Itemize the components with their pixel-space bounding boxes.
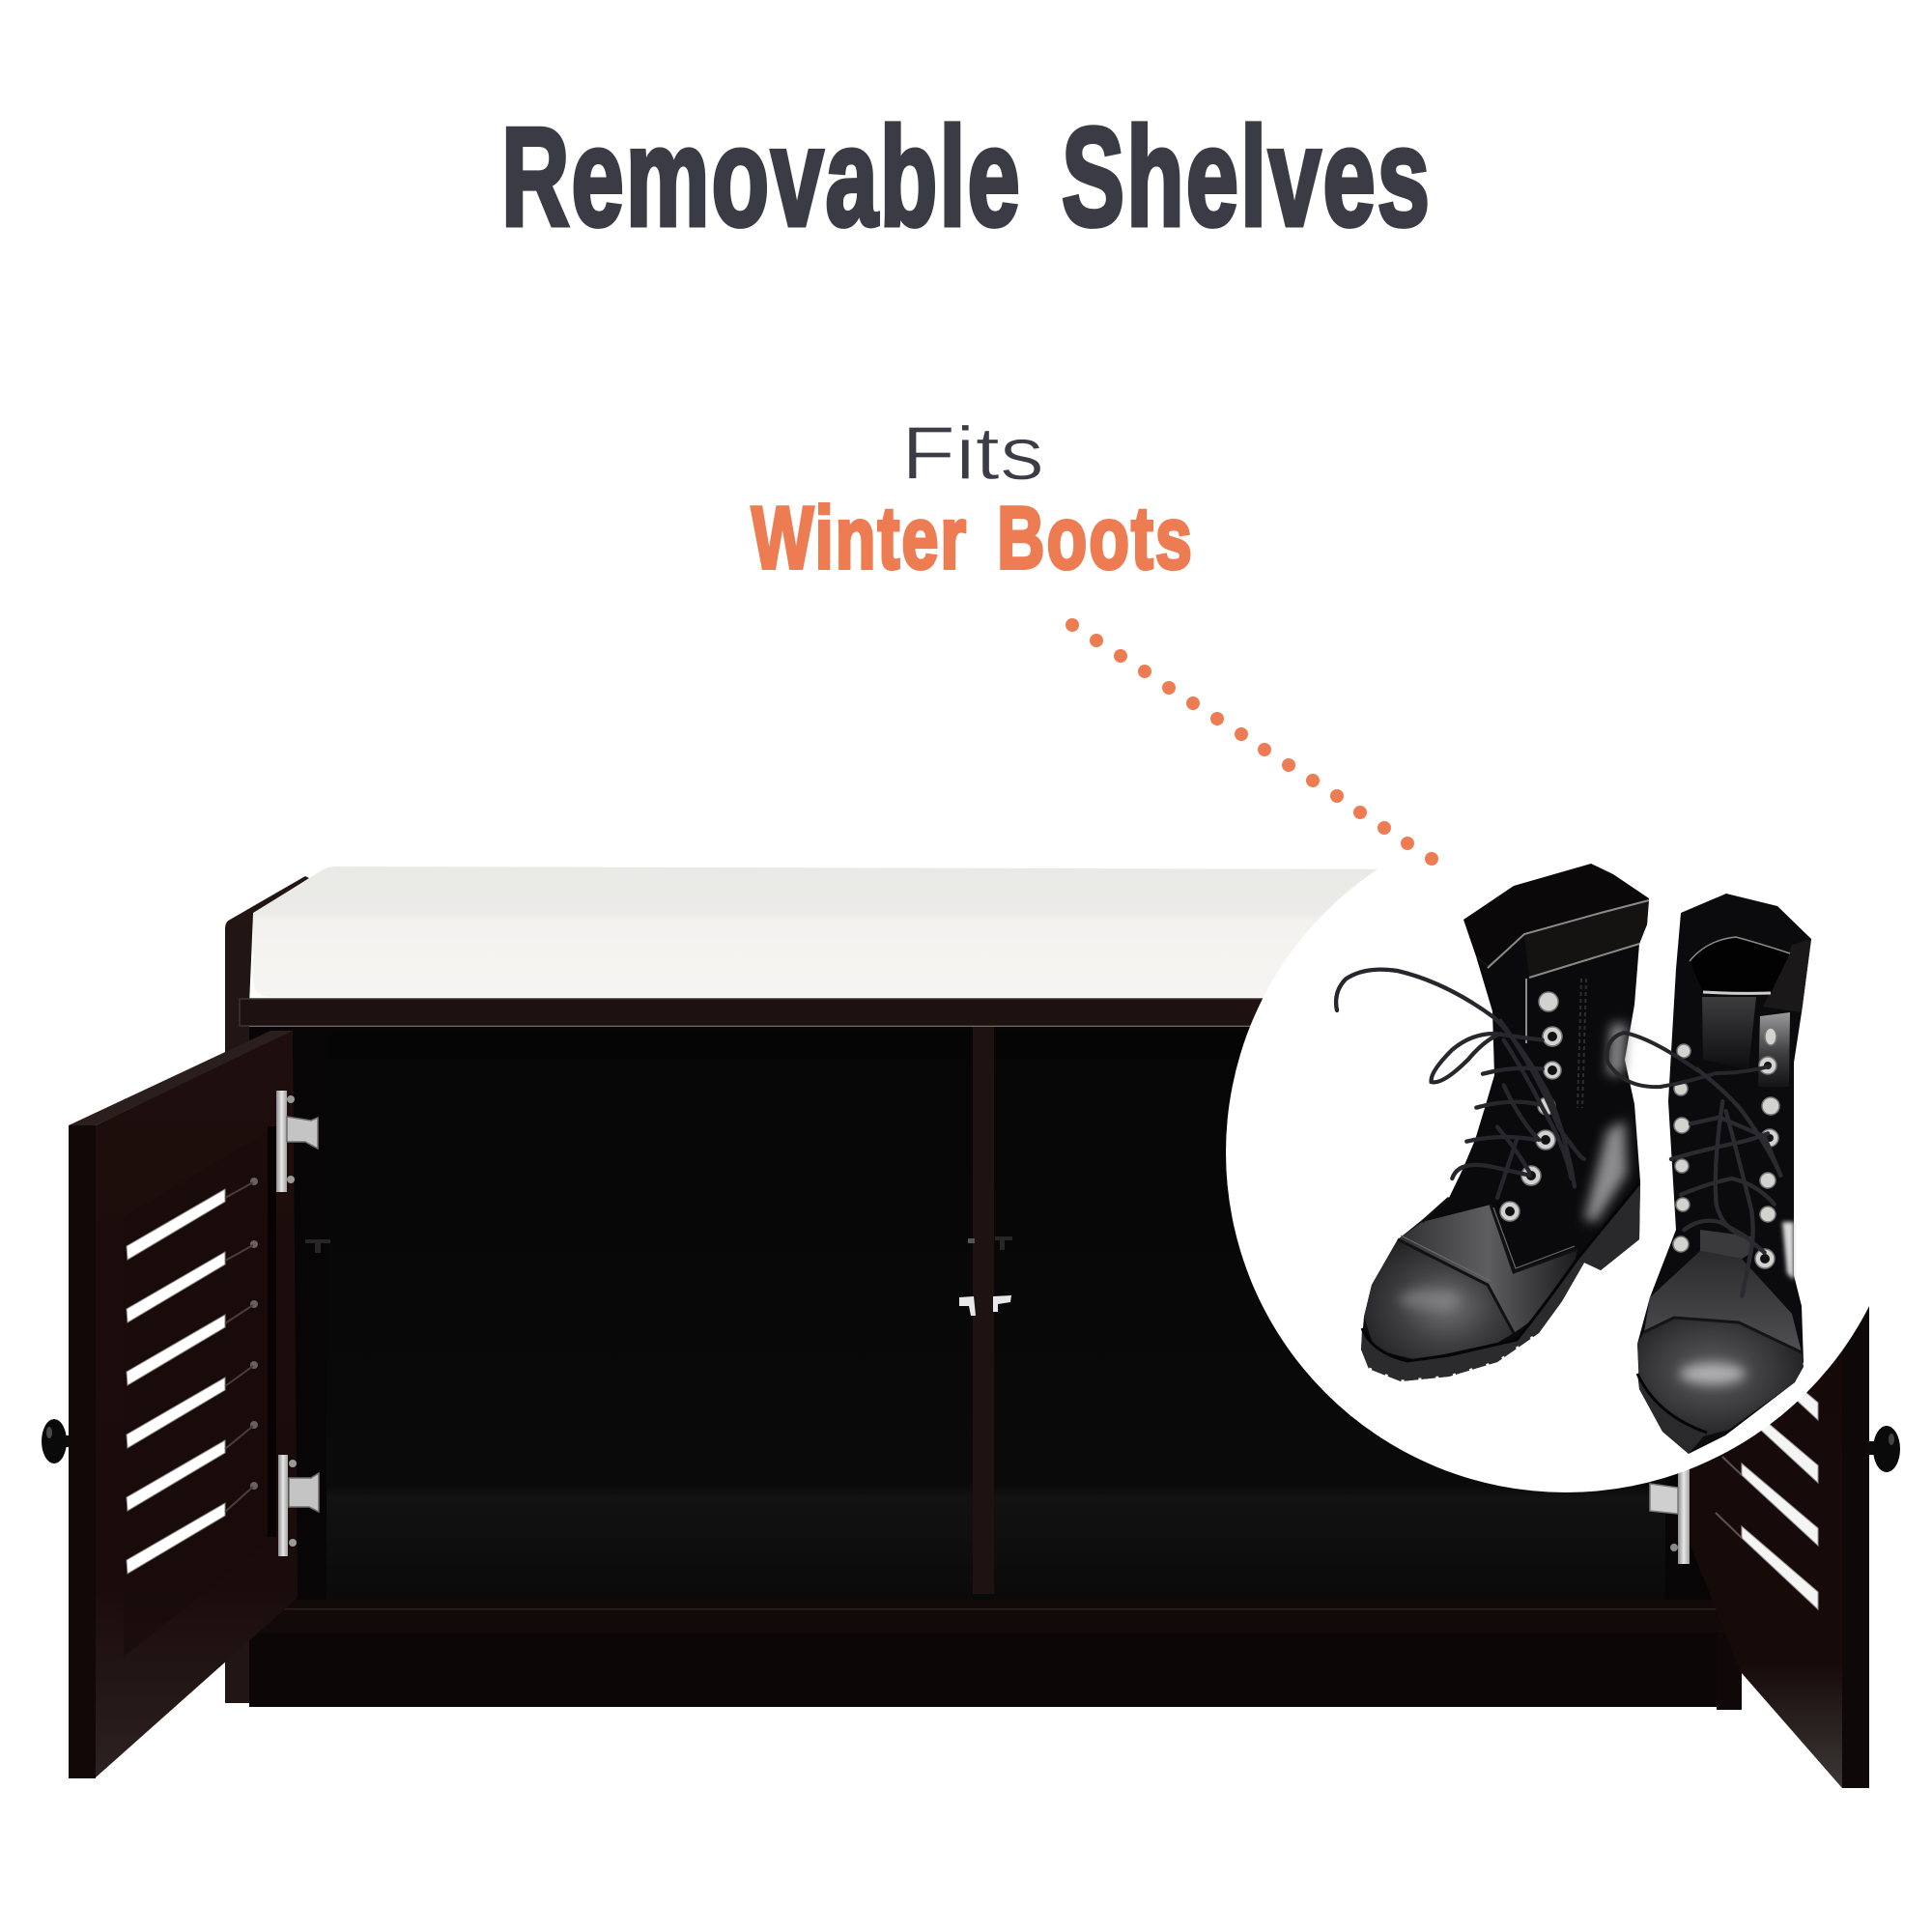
slat guide lines: [225, 1182, 253, 1512]
upper sheen panel: [1758, 1012, 1790, 1087]
sole: [1638, 1378, 1704, 1454]
boot collar: [1463, 864, 1649, 978]
lower lacing: [1671, 1069, 1780, 1296]
title: Removable Shelves: [501, 99, 1432, 255]
left boot: [1336, 864, 1649, 1381]
left door: [69, 1030, 298, 1778]
shelf clips, lower: [959, 1295, 1011, 1316]
lace loop: [1607, 1033, 1769, 1087]
recessed panel shade: [124, 1130, 270, 1657]
bottom left hinge: [278, 1455, 319, 1556]
boot body: [1637, 894, 1811, 1454]
louver slats: [1742, 1338, 1818, 1609]
toe cap: [1637, 1318, 1804, 1437]
door face: [96, 1030, 298, 1777]
white circle: [1226, 812, 1906, 1492]
sole: [1361, 1259, 1584, 1381]
eyelets: [1673, 1028, 1779, 1268]
shelf pegs, upper: [305, 1236, 1012, 1253]
right boot: [1607, 894, 1811, 1454]
left door knob: [42, 1419, 70, 1463]
peg, left of divider: [968, 1238, 975, 1243]
cap and flap stitching: [1398, 1198, 1577, 1333]
seat cushion: [253, 867, 1430, 997]
rail highlight line: [249, 1608, 1727, 1609]
welt line: [1637, 1374, 1707, 1433]
opening trim: [1690, 937, 1790, 961]
toe highlight: [1680, 1363, 1746, 1384]
boot opening: [1690, 937, 1790, 993]
tongue end band: [1700, 1230, 1751, 1259]
collar fold: [1524, 900, 1649, 978]
bench side panel and top edge: [225, 876, 309, 1703]
collar trim lines: [1488, 900, 1649, 1043]
louver slats: [127, 1189, 225, 1574]
shaft stitching: [1577, 979, 1586, 1108]
eyelets: [1500, 992, 1562, 1221]
eyelet holes: [1760, 1062, 1774, 1264]
right door: [1690, 1294, 1869, 1788]
eyelet holes: [1505, 1032, 1557, 1216]
label: Winter Boots: Winter Boots: [752, 490, 1194, 587]
bench with open doors: [42, 867, 1900, 1788]
tongue: [1702, 997, 1756, 1061]
door front edge: [69, 1125, 96, 1778]
cabinet interior: [249, 1027, 1727, 1600]
slat screws: [250, 1178, 258, 1490]
welt line: [1362, 1183, 1639, 1361]
door face: [1690, 1294, 1842, 1788]
right door knob: [1868, 1426, 1900, 1472]
door front edge: [1842, 1294, 1869, 1788]
top left hinge: [276, 1091, 318, 1192]
rail under the cushion: [240, 999, 1302, 1026]
base board: [249, 1633, 1719, 1707]
tread notches: [1369, 1333, 1539, 1381]
interior back panel: [327, 1030, 1665, 1600]
heel: [1577, 1183, 1640, 1270]
toe stitching: [1644, 1318, 1802, 1352]
bottom rail: [249, 1600, 1727, 1633]
toe highlight: [1399, 1290, 1461, 1309]
shaft sheen: [1584, 1024, 1627, 1222]
label: Fits: Fits: [901, 411, 1044, 496]
dotted pointer line: [1065, 618, 1438, 866]
slat guide lines: [1716, 1457, 1742, 1538]
stitching highlight: [1401, 1208, 1575, 1281]
vamp: [1644, 1251, 1802, 1352]
boot body: [1361, 935, 1640, 1381]
centre divider: [973, 1027, 994, 1594]
toe cap: [1364, 1239, 1514, 1360]
door panel groove: [268, 1126, 276, 1537]
tongue trim: [1703, 992, 1771, 993]
circular boots inset: [1226, 864, 1869, 1492]
lacing: [1336, 970, 1584, 1198]
collar suede strip: [1763, 939, 1811, 1012]
vamp: [1398, 1205, 1577, 1333]
lower sheen: [1782, 1222, 1794, 1280]
right hinge: [1650, 1449, 1690, 1564]
door top edge: [69, 1031, 293, 1125]
right leg: [1717, 1633, 1742, 1710]
